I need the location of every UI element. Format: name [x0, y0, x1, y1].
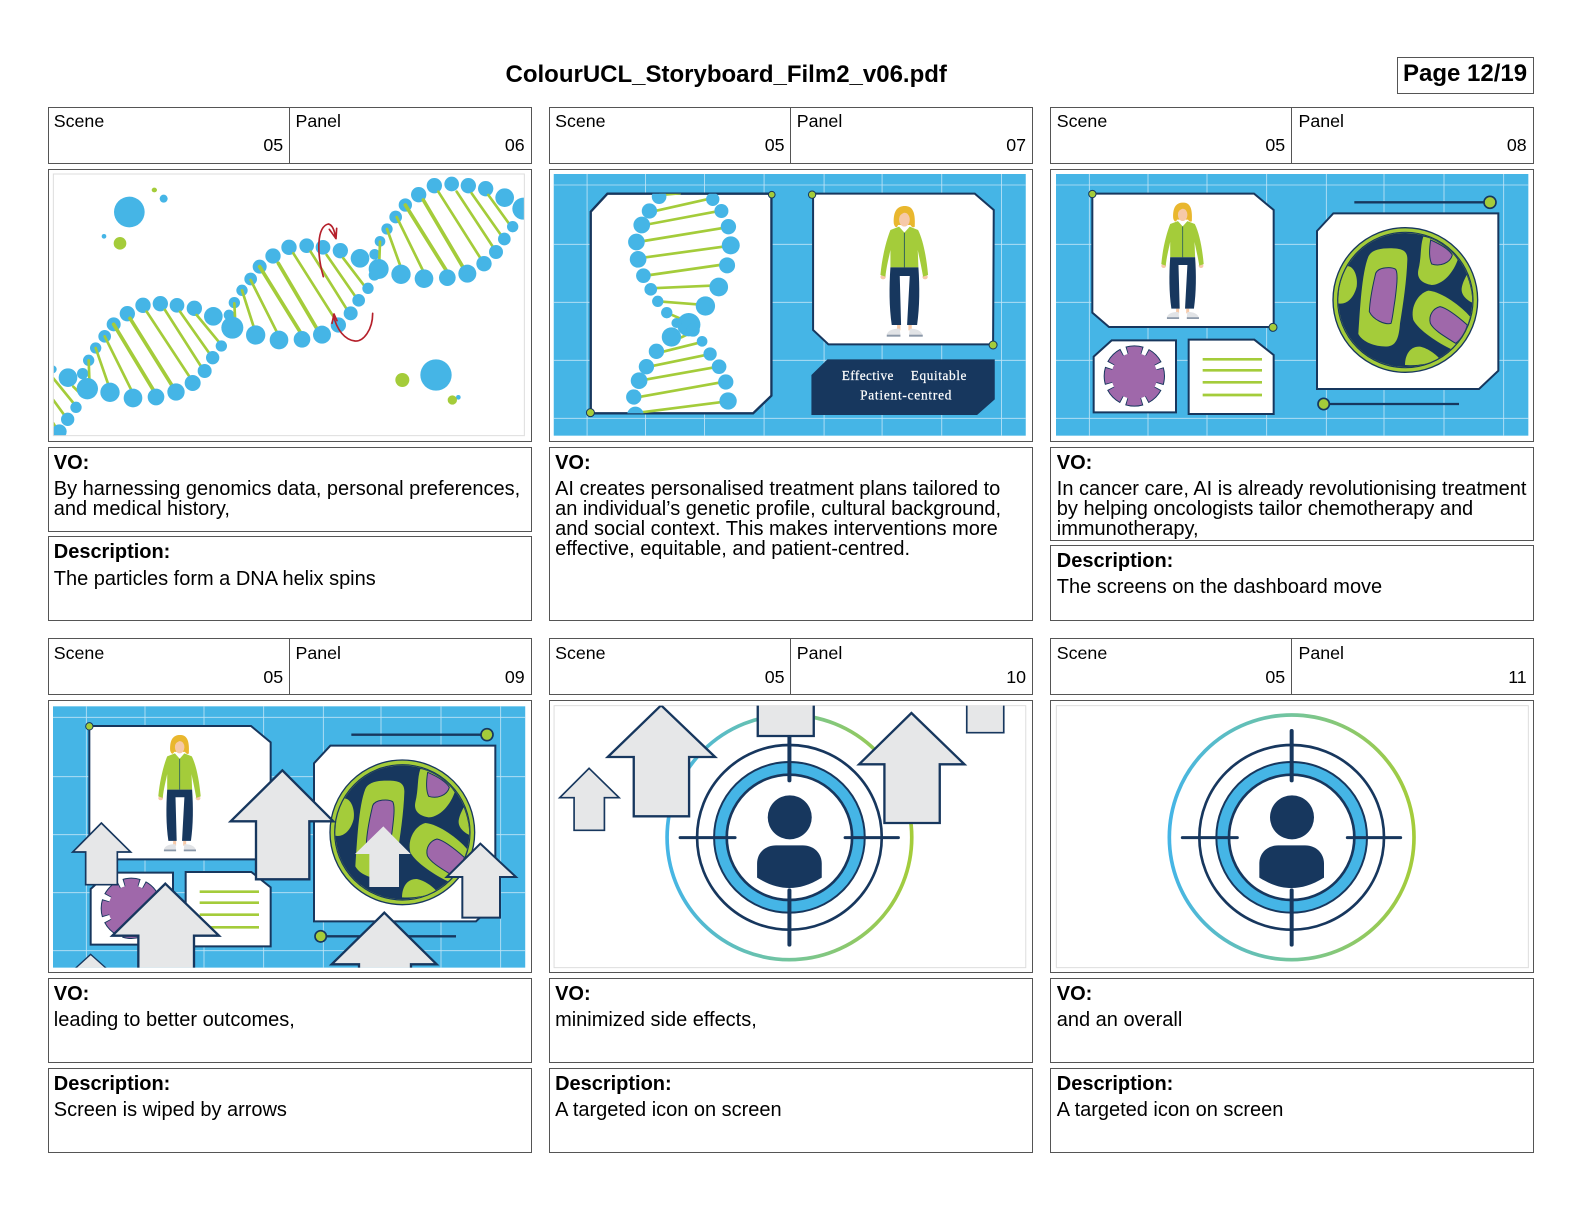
image: dashboard screens — [1050, 169, 1534, 442]
voice-over text: and social context. This makes interventions more — [555, 518, 998, 540]
voice-over text — [1050, 447, 1534, 541]
page number box — [1397, 57, 1534, 94]
description text — [549, 1068, 1033, 1153]
panel header: Panel — [797, 643, 842, 663]
voice-over text: by helping oncologists tailor chemotherapy and — [1057, 498, 1473, 520]
panel: scene 05 panel 06 — [48, 107, 532, 621]
voice-over text — [549, 978, 1033, 1063]
panel header: 05 — [263, 135, 283, 155]
image: DNA screen and person: Patient-centred — [860, 388, 952, 403]
voice-over text: and an overall — [1057, 1009, 1182, 1031]
panel: scene 05 panel 07 — [549, 107, 1033, 621]
description text — [48, 1068, 532, 1153]
description text: Description: — [1057, 550, 1173, 572]
voice-over text: and medical history, — [54, 498, 230, 520]
voice-over text: an individual’s genetic profile, cultural background, — [555, 498, 1001, 520]
description text: The particles form a DNA helix spins — [54, 568, 376, 590]
description text: Description: — [54, 541, 170, 563]
panel header: 11 — [1508, 667, 1527, 687]
voice-over text: VO: — [1057, 983, 1092, 1005]
panel header — [48, 638, 532, 695]
voice-over text: VO: — [1057, 452, 1092, 474]
panel: scene 05 panel 10 — [549, 638, 1033, 1153]
voice-over text: effective, equitable, and patient-centred. — [555, 538, 910, 560]
panel header — [549, 107, 1033, 164]
image: DNA screen and person: Equitable — [911, 368, 966, 383]
voice-over text: immunotherapy, — [1057, 518, 1199, 540]
voice-over text: By harnessing genomics data, personal preferences, — [54, 478, 520, 500]
description text — [48, 536, 532, 621]
panel header — [48, 107, 532, 164]
voice-over text — [48, 447, 532, 532]
panel header: 06 — [505, 135, 525, 155]
panel header — [1050, 107, 1534, 164]
panel header — [1050, 638, 1534, 695]
panel header: Panel — [1298, 111, 1344, 131]
title: ColourUCL_Storyboard_Film2_v06.pdf — [506, 61, 947, 88]
panel header: Panel — [797, 111, 842, 131]
image: DNA helix particles — [48, 169, 532, 442]
image: target icon — [1050, 700, 1534, 973]
panel header — [549, 638, 1033, 695]
panel: scene 05 panel 09 — [48, 638, 532, 1153]
voice-over text: VO: — [555, 983, 591, 1005]
image: DNA screen and person — [549, 169, 1033, 442]
panel header: 07 — [1006, 135, 1026, 155]
panel header: 05 — [263, 667, 283, 687]
voice-over text: AI creates personalised treatment plans tailored to — [555, 478, 1000, 500]
voice-over text — [48, 978, 532, 1063]
description text: Description: — [54, 1073, 170, 1095]
voice-over text: leading to better outcomes, — [54, 1009, 295, 1031]
image: target icon with arrows — [549, 700, 1033, 973]
voice-over text: VO: — [555, 452, 591, 474]
panel header: 05 — [1265, 135, 1285, 155]
panel header: 08 — [1507, 135, 1527, 155]
panel: scene 05 panel 08 — [1050, 107, 1534, 621]
image: DNA screen and person: Effective — [842, 368, 893, 383]
voice-over text — [1050, 978, 1534, 1063]
panel header: Panel — [296, 111, 341, 131]
voice-over text — [549, 447, 1033, 621]
description text: Screen is wiped by arrows — [54, 1099, 287, 1121]
panel header: Panel — [1298, 643, 1344, 663]
panel header: Scene — [54, 643, 104, 663]
voice-over text: VO: — [54, 983, 89, 1005]
description text: The screens on the dashboard move — [1057, 576, 1382, 598]
panel header: 05 — [765, 667, 784, 687]
panel header: Panel — [296, 643, 341, 663]
panel header: 05 — [765, 135, 784, 155]
panel: scene 05 panel 11 — [1050, 638, 1534, 1153]
voice-over text: In cancer care, AI is already revolutionising treatment — [1057, 478, 1526, 500]
panel header: Scene — [555, 643, 606, 663]
panel header: 10 — [1006, 667, 1026, 687]
description text: Description: — [555, 1073, 672, 1095]
panel header: Scene — [555, 111, 606, 131]
description text: A targeted icon on screen — [1057, 1099, 1283, 1121]
panel header: Scene — [1057, 643, 1107, 663]
description text: Description: — [1057, 1073, 1173, 1095]
voice-over text: minimized side effects, — [555, 1009, 757, 1031]
description text — [1050, 1068, 1534, 1153]
description text: A targeted icon on screen — [555, 1099, 782, 1121]
voice-over text: VO: — [54, 452, 89, 474]
panel header: 09 — [505, 667, 525, 687]
panel header: Scene — [1057, 111, 1107, 131]
panel header: Scene — [54, 111, 104, 131]
panel header: 05 — [1265, 667, 1285, 687]
image: dashboard wiped by arrows — [48, 700, 532, 973]
page number box: Page 12/19 — [1403, 60, 1527, 87]
description text — [1050, 545, 1534, 621]
